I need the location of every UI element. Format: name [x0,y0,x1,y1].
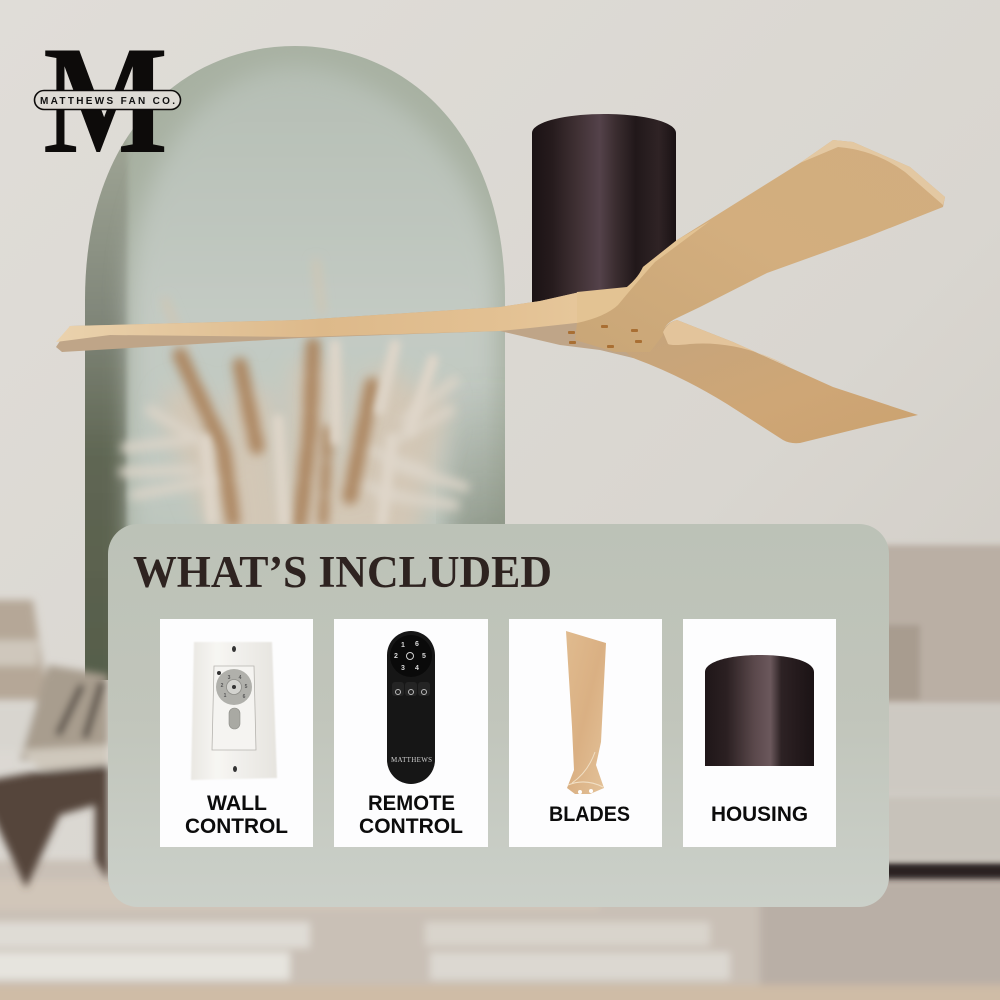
label: BLADES [549,802,630,826]
icon: wall control: 1 [224,693,227,699]
label: CONTROL [185,814,288,838]
ceiling fan [56,114,945,443]
icon: remote control: 6 [415,641,419,648]
fan housing [532,114,676,312]
label [185,791,288,838]
floor [0,860,1000,1000]
icon: blade [566,631,606,794]
icon: wall control: 4 [239,675,242,681]
icon: housing [705,655,814,766]
sofa right [880,545,1000,879]
logo: Matthews Fan Co. [34,14,180,186]
icon: remote control: 4 [415,665,419,672]
logo name pill [34,90,180,110]
fan blade: lower right [600,320,918,443]
label [359,791,463,838]
fan blade: left [56,292,633,358]
card: housing [683,619,836,847]
icon: remote control [387,631,435,784]
fan hub screws [568,325,642,348]
label: REMOTE [368,791,455,815]
armchair and throw blanket left [0,600,108,888]
logo name pill: MATTHEWS FAN CO. [40,96,175,107]
panel: what's included [108,524,889,907]
icon: wall control: 3 [228,675,231,681]
logo monogram M: M [43,14,168,186]
arch niche with pampas grass [85,46,505,680]
card: blades [509,619,662,847]
icon: wall control: 6 [243,694,246,700]
label: WALL [207,791,267,815]
label: CONTROL [359,814,463,838]
icon: wall control [191,642,277,780]
icon: wall control: 2 [221,683,224,689]
icon: remote control: 5 [422,653,426,660]
fan blade: upper right [575,140,945,352]
pampas grass [114,308,472,524]
heading: WHAT’S INCLUDED [133,547,552,597]
icon: remote control: 2 [394,653,398,660]
icon: wall control: 5 [245,684,248,690]
icon: remote control: 3 [401,665,405,672]
card: wall control [160,619,313,847]
icon: remote control: MATTHEWS [391,756,432,764]
card: remote control [334,619,488,847]
icon: remote control: 1 [401,642,405,649]
label: HOUSING [711,802,808,826]
